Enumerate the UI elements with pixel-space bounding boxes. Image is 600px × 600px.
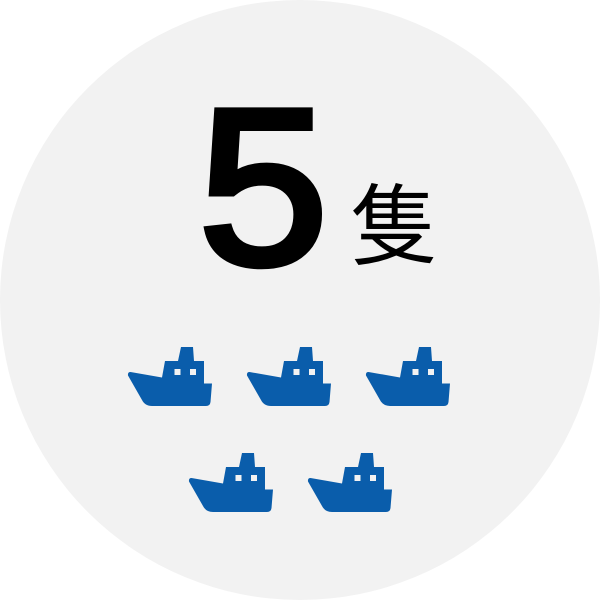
icon: ship 4 <box>189 453 273 512</box>
icon: ship 2 <box>247 347 331 406</box>
unit label: 隻 <box>349 178 439 278</box>
icon: ship 3 <box>366 347 450 406</box>
number 5: 5 <box>198 64 328 311</box>
icon: ship 5 <box>308 453 392 512</box>
icon: ship 1 <box>128 347 212 406</box>
